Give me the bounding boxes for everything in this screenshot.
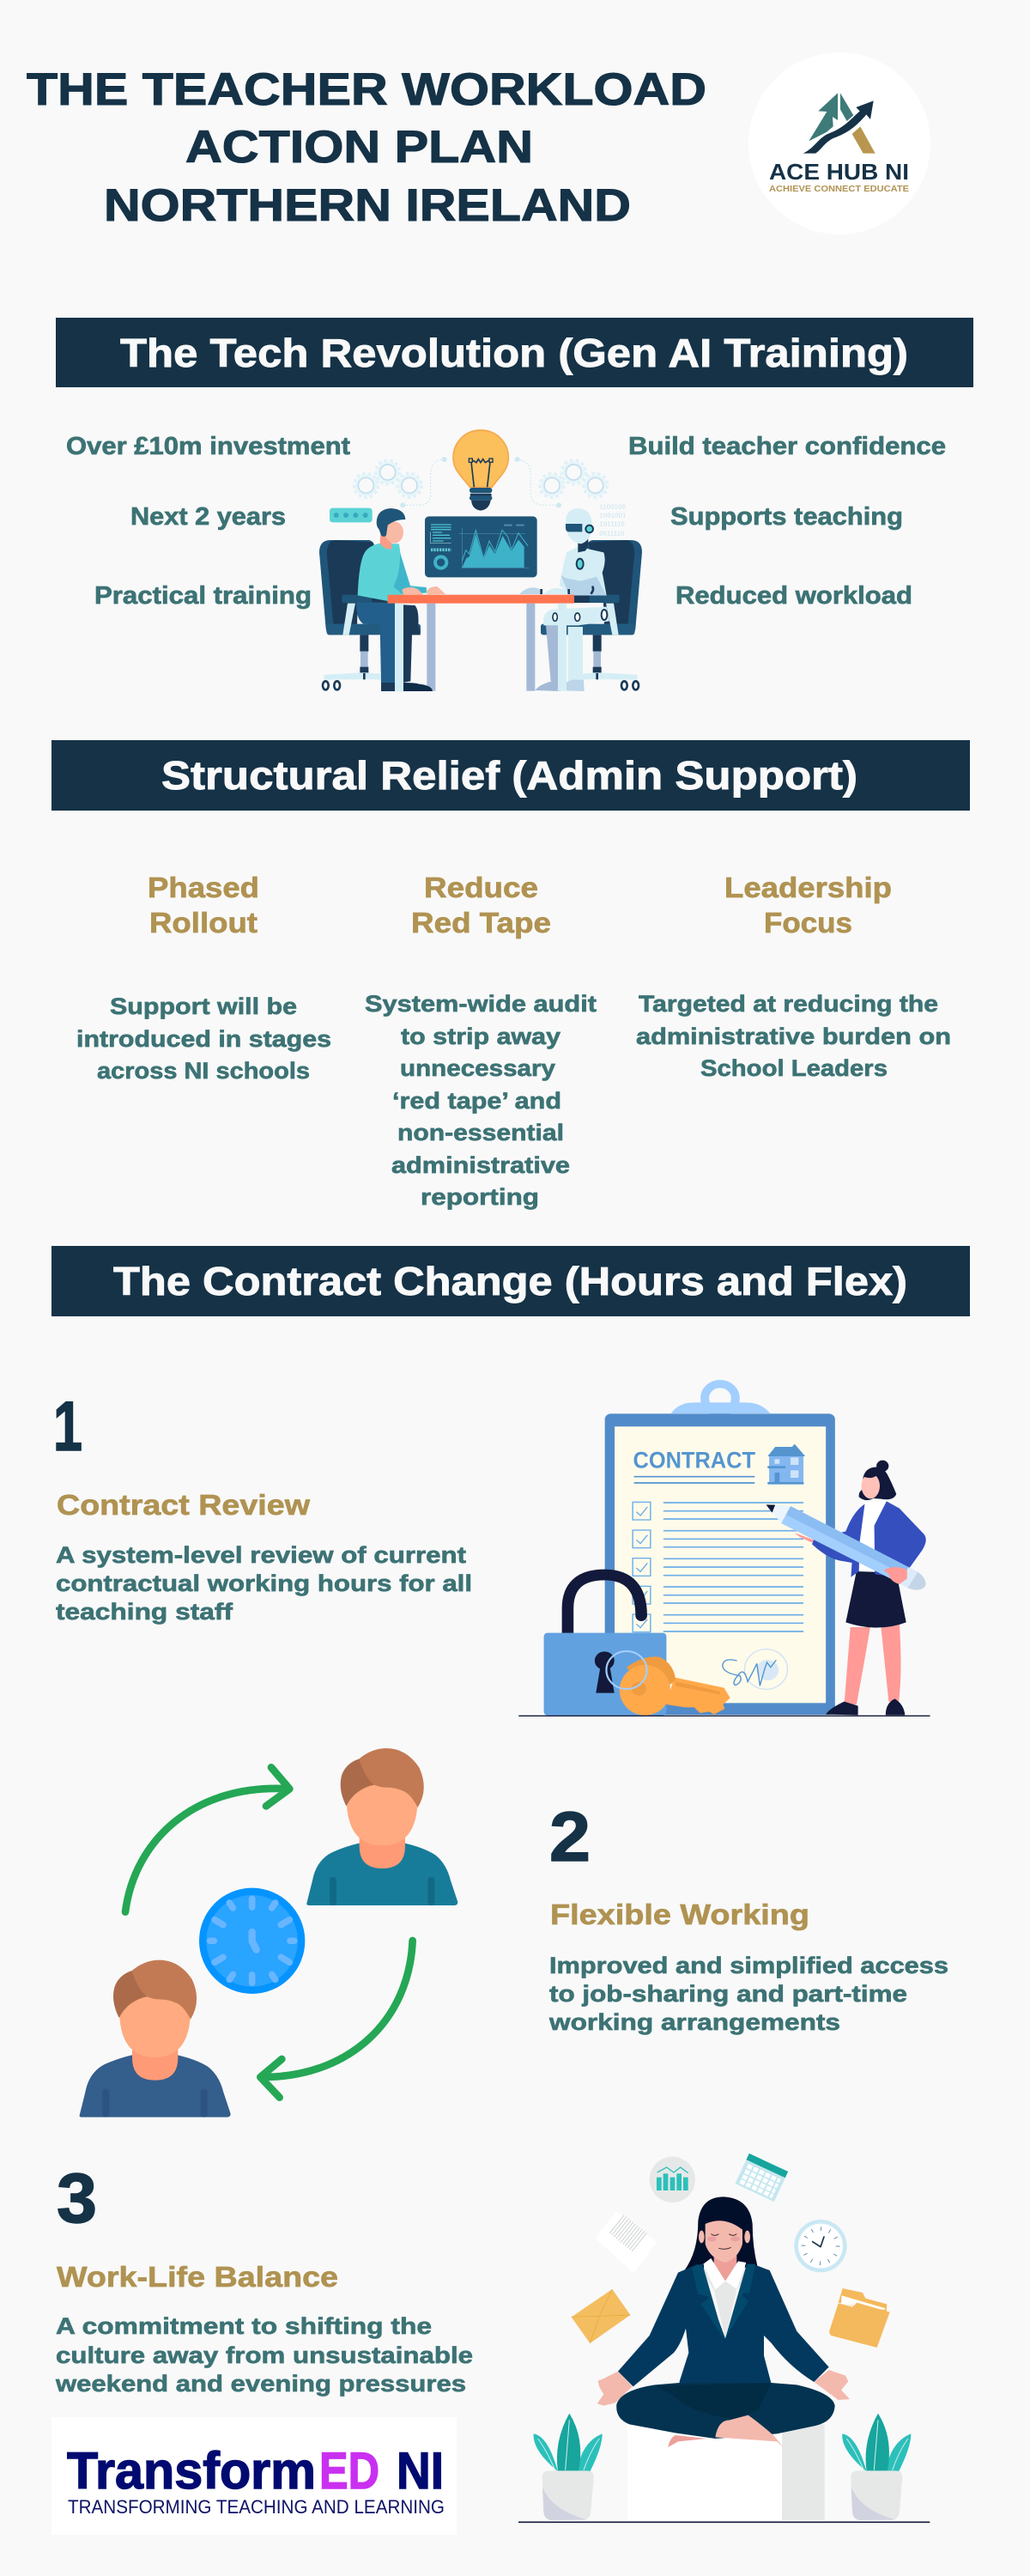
tech benefits right column: Supports teaching [670, 503, 903, 531]
clipboard: CONTRACT [633, 1447, 755, 1473]
right chair [541, 540, 642, 690]
icon: folder [829, 2288, 890, 2348]
tech benefits left column: Practical training [94, 582, 312, 610]
step 3: work-life balance: A commitment to shifting the [56, 2313, 432, 2339]
step 1: contract review: A system-level review of current [56, 1542, 466, 1568]
plant right [842, 2414, 911, 2520]
binary digits [599, 503, 627, 537]
step 2: flexible working: Flexible Working [550, 1899, 809, 1931]
clipboard [605, 1384, 835, 1715]
chart screen [425, 516, 537, 577]
column: reduce red tape: System-wide audit [365, 991, 597, 1017]
column: phased rollout: Rollout [149, 908, 258, 939]
step 2: flexible working: 2 [549, 1798, 591, 1876]
title: THE TEACHER WORKLOAD [27, 64, 706, 115]
column: phased rollout: across NI schools [97, 1058, 310, 1084]
section header: contract change: The Contract Change (Hours and Flex) [113, 1259, 907, 1303]
column: leadership focus: School Leaders [700, 1055, 888, 1081]
icon: document [595, 2211, 657, 2273]
step 1: contract review: 1 [53, 1388, 82, 1466]
icon: speech bubble [330, 508, 373, 522]
column: reduce red tape: to strip away [401, 1024, 560, 1049]
column: leadership focus: Targeted at reducing the [639, 991, 938, 1017]
step 2: flexible working [548, 1798, 948, 2035]
step 2: flexible working: Improved and simplified access [549, 1953, 948, 1978]
column: reduce red tape: non-essential [397, 1120, 564, 1145]
logo: TransformED NI: NI [397, 2442, 444, 2500]
section header: structural relief [52, 740, 970, 811]
logo: TransformED NI: Transform [67, 2442, 316, 2500]
column: reduce red tape: Reduce [424, 872, 538, 904]
icon: chart circle [650, 2157, 695, 2202]
title: NORTHERN IRELAND [104, 180, 631, 231]
icon: gears left [354, 460, 421, 497]
column: leadership focus [636, 872, 951, 1081]
logo: TransformED NI: ED [319, 2442, 379, 2500]
icon: gears right [540, 460, 607, 497]
binary digits: 0011110 [599, 529, 625, 537]
title [27, 64, 706, 231]
column: phased rollout: Support will be [110, 993, 297, 1019]
logo: ACE HUB NI: ACHIEVE CONNECT EDUCATE [769, 184, 909, 194]
step 2: flexible working: working arrangements [548, 2009, 840, 2035]
icon: envelope [572, 2289, 630, 2343]
step 1: contract review: contractual working hours for all [56, 1571, 472, 1596]
key [606, 1651, 730, 1716]
logo: ACE HUB NI [748, 52, 930, 234]
illustration: job share people with clock [80, 1748, 457, 2117]
step 2: flexible working: to job-sharing and part-time [549, 1981, 907, 2007]
left chair [319, 540, 421, 690]
tech benefits right column: Build teacher confidence [628, 433, 946, 460]
step 3: work-life balance: 3 [57, 2160, 97, 2238]
column: reduce red tape: ‘red tape’ and [392, 1088, 561, 1114]
tech benefits left column: Over £10m investment [66, 433, 350, 460]
robot [519, 508, 609, 691]
step 3: work-life balance: Work-Life Balance [57, 2262, 338, 2293]
icon: ACE arrow mark [803, 93, 876, 154]
pedestal [627, 2424, 825, 2520]
illustration: woman meditating [518, 2154, 930, 2522]
section header: tech revolution [56, 318, 973, 387]
column: leadership focus: Focus [764, 908, 852, 939]
step 1: contract review: teaching staff [56, 1599, 233, 1625]
column: reduce red tape: reporting [421, 1184, 539, 1210]
column: reduce red tape: unnecessary [400, 1055, 555, 1081]
padlock [544, 1575, 666, 1716]
logo: TransformED NI [52, 2417, 457, 2535]
icon: house [767, 1444, 805, 1485]
step 3: work-life balance [55, 2160, 473, 2397]
logo: ACE HUB NI: ACE HUB NI [769, 159, 909, 185]
column: reduce red tape [365, 872, 597, 1210]
column: reduce red tape: administrative [391, 1152, 570, 1178]
icon: calendar [736, 2154, 788, 2202]
step 3: work-life balance: weekend and evening pressures [55, 2371, 466, 2397]
step 1: contract review: Contract Review [57, 1490, 311, 1522]
section header: structural relief: Structural Relief (Admin Support) [161, 753, 857, 798]
icon: clock [199, 1888, 305, 1994]
section header: tech revolution: The Tech Revolution (Gen AI Training) [120, 331, 908, 375]
step 1: contract review [53, 1388, 472, 1625]
binary digits: 1001001 [600, 512, 627, 519]
illustration: contract clipboard, lock and woman [518, 1384, 930, 1716]
icon: wall clock [794, 2220, 847, 2272]
column: leadership focus: administrative burden on [636, 1024, 951, 1049]
person top right [306, 1748, 457, 1905]
binary digits: 1011110 [600, 520, 625, 528]
illustration: teacher and robot at desk [319, 430, 642, 691]
plant left [534, 2414, 603, 2520]
step 3: work-life balance: culture away from unsustainable [56, 2342, 473, 2368]
arrow: curved top [125, 1767, 289, 1912]
arrow: curved bottom [260, 1941, 413, 2098]
tech benefits right column [628, 433, 946, 610]
column: reduce red tape: Red Tape [411, 908, 551, 939]
column: phased rollout [76, 872, 331, 1084]
section header: contract change [52, 1246, 970, 1316]
tech benefits right column: Reduced workload [676, 582, 912, 610]
woman [597, 2196, 850, 2447]
tech benefits left column: Next 2 years [130, 503, 286, 531]
binary digits: 1100100 [600, 503, 626, 511]
woman with pencil [766, 1461, 926, 1715]
column: leadership focus: Leadership [724, 872, 892, 904]
logo: TransformED NI: TRANSFORMING TEACHING AND LEARNING [68, 2496, 445, 2518]
tech benefits left column [66, 433, 350, 610]
column: phased rollout: Phased [148, 872, 259, 904]
person bottom left [80, 1960, 231, 2117]
desk [388, 595, 574, 691]
column: phased rollout: introduced in stages [76, 1026, 331, 1052]
person [356, 508, 445, 691]
title: ACTION PLAN [185, 122, 533, 173]
icon: light bulb [453, 430, 508, 511]
